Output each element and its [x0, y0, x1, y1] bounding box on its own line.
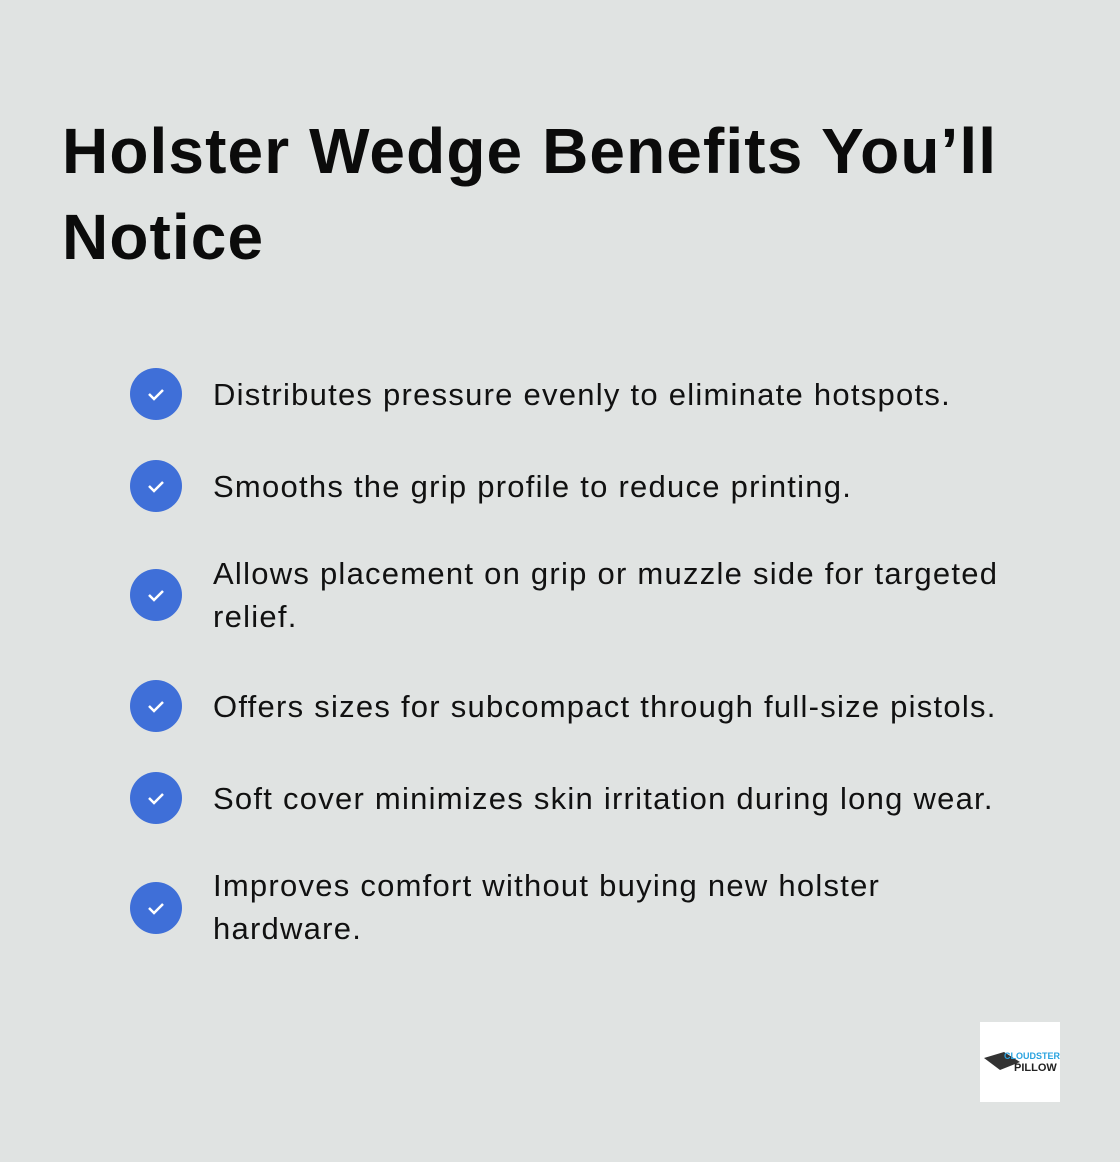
logo: CLOUDSTER — [1004, 1051, 1060, 1061]
logo: PILLOW — [1014, 1062, 1057, 1074]
item 6: hardware. — [213, 911, 362, 946]
item 5 — [130, 772, 994, 824]
item 2 — [130, 460, 852, 512]
item 4: Offers sizes for subcompact through full-size pistols. — [213, 689, 997, 724]
item 4 — [130, 680, 997, 732]
item 3: relief. — [213, 599, 298, 634]
title: Notice — [62, 201, 264, 273]
logo — [980, 1022, 1060, 1102]
item 1: Distributes pressure evenly to eliminate hotspots. — [213, 377, 951, 412]
item 3 — [130, 556, 998, 634]
item 6: Improves comfort without buying new holster — [213, 868, 880, 903]
item 3: Allows placement on grip or muzzle side for targeted — [213, 556, 998, 591]
title — [62, 115, 997, 273]
item 2: Smooths the grip profile to reduce printing. — [213, 469, 852, 504]
title: Holster Wedge Benefits You’ll — [62, 115, 997, 187]
item 5: Soft cover minimizes skin irritation during long wear. — [213, 781, 994, 816]
item 1 — [130, 368, 951, 420]
item 6 — [130, 868, 880, 946]
